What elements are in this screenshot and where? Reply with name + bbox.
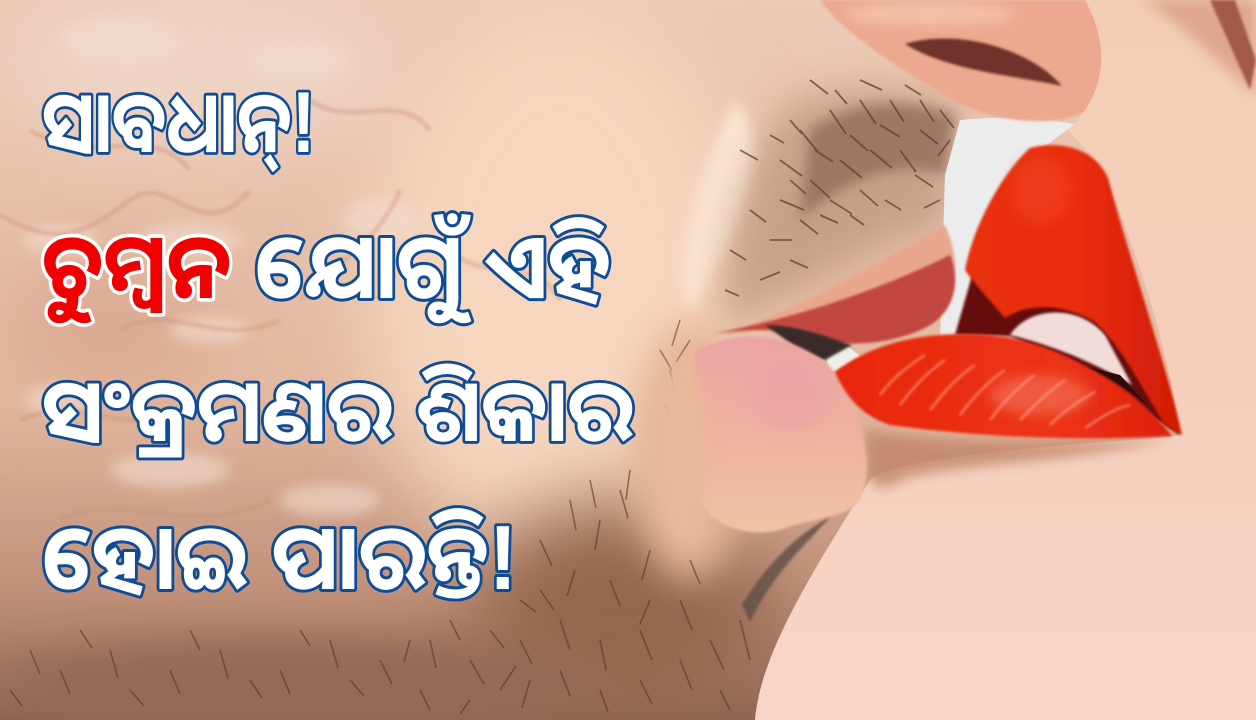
teeth — [1010, 312, 1132, 385]
pale gap between faces — [940, 118, 1075, 340]
red lower lip — [835, 334, 1172, 438]
cheek skin texture — [0, 100, 560, 520]
dark inner mouth — [955, 230, 1180, 435]
mottled cheek skin — [22, 16, 416, 516]
nose — [820, 0, 1111, 121]
headline line 2: ଚୁମ୍ବନ ଯୋଗୁଁ ଏହି — [42, 213, 611, 324]
bright skin beside moustache — [684, 100, 753, 310]
nostril shadow on woman's face — [1140, 0, 1256, 95]
headline line 1: ସାବଧାନ୍! — [42, 74, 315, 173]
woman's face — [755, 0, 1256, 720]
stubble beside the lips — [660, 320, 690, 467]
mouth line — [1080, 365, 1150, 408]
headline — [42, 74, 634, 609]
stubble lower jaw — [10, 470, 750, 714]
stubble under lower lip — [742, 517, 830, 622]
red upper lip — [965, 145, 1182, 435]
man's moustache — [721, 80, 960, 330]
headline line 4: ହୋଇ ପାରନ୍ତି! — [42, 506, 517, 609]
dark mouth gap — [765, 325, 852, 360]
man's upper lip — [715, 225, 955, 344]
headline line 3: ସଂକ୍ରମଣର ଶିକାର — [42, 363, 634, 460]
shadow under lower lip — [865, 430, 1170, 487]
man's lower lip — [658, 337, 867, 540]
